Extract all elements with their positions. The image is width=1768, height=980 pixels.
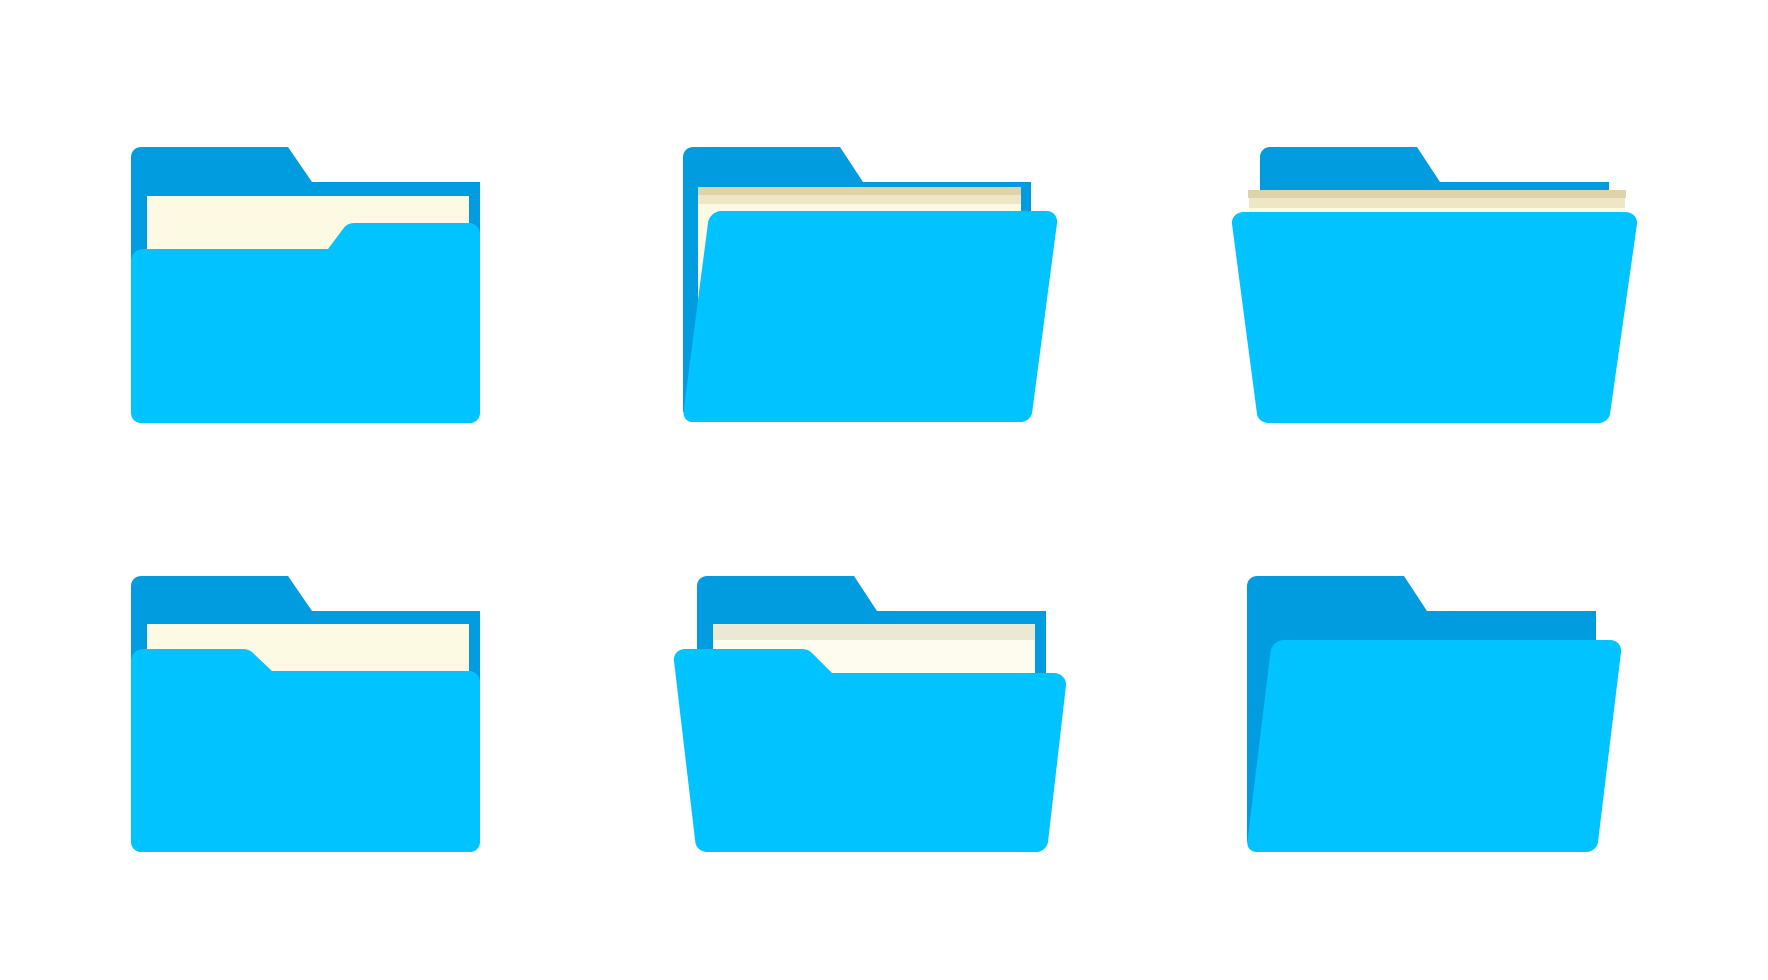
folder front	[674, 649, 1066, 852]
folder back	[1247, 576, 1596, 842]
folder front	[1247, 640, 1621, 852]
icon: empty open folder leaning right	[1247, 576, 1621, 852]
paper sheet	[1248, 190, 1626, 213]
folder back	[131, 576, 480, 720]
paper sheet	[147, 196, 469, 266]
folder back	[1260, 147, 1609, 195]
folder back	[697, 576, 1046, 700]
folder front	[683, 211, 1057, 422]
folder front	[131, 649, 480, 852]
paper sheet	[147, 624, 469, 684]
icon: closed folder with paper, tab on right	[131, 147, 480, 423]
paper sheet	[713, 624, 1035, 694]
folder front	[1232, 212, 1637, 423]
folder back	[683, 147, 1031, 412]
paper sheet	[698, 187, 1021, 317]
folder back	[131, 147, 480, 300]
icon: closed folder with paper, tab on left	[131, 576, 480, 852]
icon: open folder with paper, leaning right	[683, 147, 1057, 422]
folder front	[131, 223, 480, 423]
icon: open folder with paper, front tab on left	[674, 576, 1066, 852]
icon: wide open folder with paper edge	[1232, 147, 1637, 423]
